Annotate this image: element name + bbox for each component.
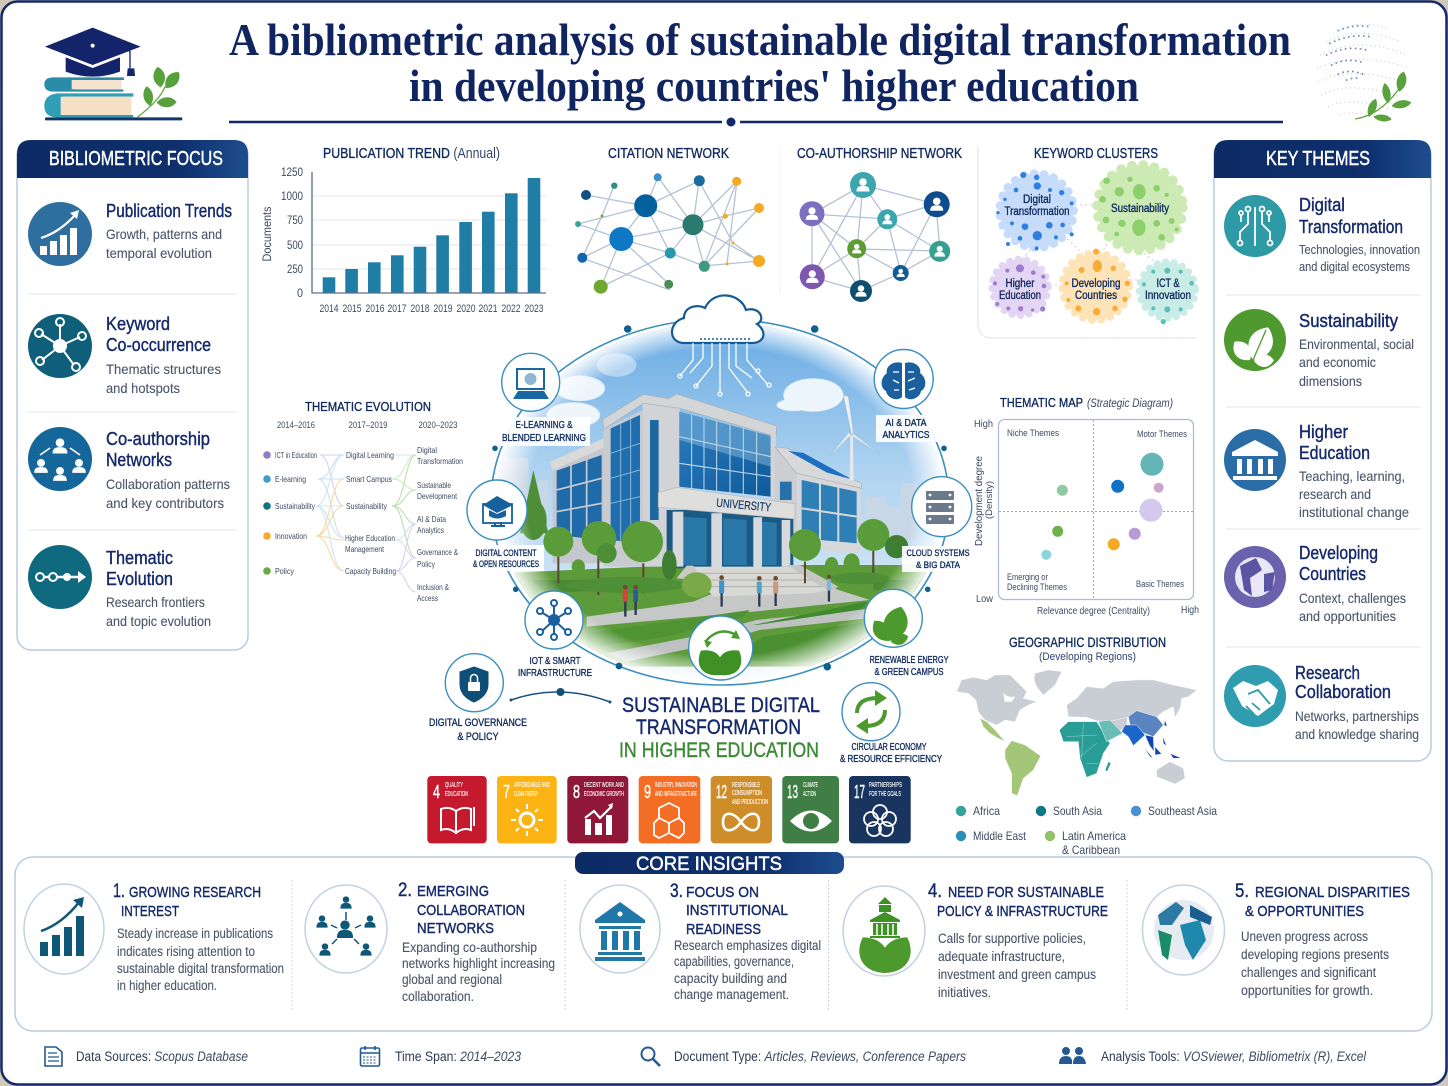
chart: keyword clusters: Education — [999, 290, 1041, 302]
callout: AI and data analytics: AI & DATA — [886, 417, 926, 429]
icon: SDG 12: CONSUMPTION — [732, 790, 762, 797]
icon: SDG 17: FOR THE GOALS — [869, 791, 901, 798]
insight 5: opportunities for growth. — [1241, 983, 1373, 998]
icon: SDG 4: 4 — [433, 782, 440, 802]
chart: publication trend: 2017 — [388, 303, 406, 315]
icon: cloud with circuit lines — [672, 295, 771, 396]
insight 3 — [580, 881, 821, 1002]
callout: renewable energy: & GREEN CAMPUS — [874, 667, 944, 678]
callout: IoT and smart infrastructure: INFRASTRUCTURE — [518, 668, 592, 679]
item: developing countries: Developing — [1299, 543, 1378, 563]
chart: publication trend: 750 — [287, 213, 303, 227]
heading: core insights — [575, 852, 844, 875]
chart: thematic map: THEMATIC MAP — [1000, 395, 1083, 410]
chart: keyword clusters: KEYWORD CLUSTERS — [1034, 146, 1158, 162]
chart: thematic evolution: Governance & — [417, 547, 458, 557]
skyline — [503, 458, 917, 540]
chart: publication trend: 2021 — [478, 303, 498, 315]
item: developing countries — [1224, 543, 1406, 624]
insight 1: indicates rising attention to — [117, 944, 255, 959]
callout: digital content: DIGITAL CONTENT — [476, 548, 537, 559]
icon: SDG 4: EDUCATION — [445, 791, 468, 798]
chart: thematic evolution: Development — [417, 491, 458, 501]
callout: AI and data analytics — [874, 350, 938, 442]
chart: thematic evolution: Digital Learning — [346, 450, 394, 460]
item: sustainability: and economic — [1299, 354, 1376, 370]
item: co-authorship networks: and key contributors — [106, 495, 224, 511]
chart: publication trend: PUBLICATION TREND (Annual) — [323, 146, 500, 162]
chart: thematic evolution: 2014–2016 — [277, 420, 315, 431]
insight 1: INTEREST — [121, 903, 179, 920]
insight 3: READINESS — [686, 921, 761, 938]
insight 2: collaboration. — [402, 989, 474, 1004]
icon: magnifier — [642, 1048, 660, 1066]
item: co-authorship networks: Networks — [106, 450, 172, 470]
item: keyword co-occurrence: Co-occurrence — [106, 335, 211, 355]
chart: publication trend: 2018 — [410, 303, 430, 315]
chart: citation network — [575, 146, 765, 294]
insight 1: sustainable digital transformation — [117, 961, 284, 976]
chart: thematic evolution: Sustainability — [275, 501, 316, 511]
chart: geographic distribution map: & Caribbean — [1062, 843, 1120, 857]
central campus illustration — [480, 310, 960, 690]
insight 2: NETWORKS — [417, 920, 494, 937]
trees and hedges — [520, 470, 908, 598]
chart: publication trend: 500 — [287, 238, 303, 252]
callout: circular economy: CIRCULAR ECONOMY — [852, 742, 927, 753]
chart: thematic evolution: E-learning — [275, 474, 306, 484]
icon: SDG 9: INDUSTRY, INNOVATION — [655, 782, 697, 789]
insight 5: Uneven progress across — [1241, 929, 1368, 944]
icon: SDG 13: CLIMATE — [803, 782, 818, 789]
item: digital transformation: Technologies, innovation — [1299, 242, 1420, 257]
item: co-authorship networks: Co-authorship — [106, 429, 210, 449]
item: sustainability: dimensions — [1299, 373, 1362, 389]
icon: SDG 9: AND INFRASTRUCTURE — [655, 791, 697, 798]
central heading — [619, 694, 820, 762]
chart: publication trend: 1250 — [281, 165, 303, 179]
insight 3: capabilities, governance, — [674, 954, 794, 969]
callout: digital content — [467, 480, 544, 571]
item: research collaboration: Networks, partnerships — [1295, 708, 1419, 724]
chart: co-authorship network — [780, 146, 962, 302]
item: higher education: Education — [1299, 443, 1370, 463]
chart: thematic evolution: Policy — [275, 566, 295, 576]
chart: thematic evolution: THEMATIC EVOLUTION — [305, 399, 431, 414]
chart: keyword clusters: Sustainability — [1111, 203, 1169, 215]
icon: calendar — [360, 1046, 380, 1066]
insight 3: Research emphasizes digital — [674, 938, 821, 953]
people — [625, 579, 829, 617]
title: A bibliometric analysis of sustainable digital transformation — [229, 14, 1291, 65]
callout: IoT and smart infrastructure — [518, 591, 592, 679]
insight 4 — [843, 881, 1108, 1000]
chart: thematic evolution: ICT in Education — [275, 450, 317, 460]
chart: keyword clusters: Transformation — [1004, 206, 1070, 218]
chart: keyword clusters: Countries — [1075, 290, 1117, 302]
footer: Analysis Tools: VOSviewer, Bibliometrix (R), Excel — [1101, 1049, 1367, 1064]
chart: publication trend: 2020 — [456, 303, 476, 315]
left wing — [550, 438, 606, 471]
insight 2: EMERGING — [417, 883, 489, 900]
central heading: SUSTAINABLE DIGITAL — [622, 694, 820, 717]
icon: SDG 12 — [711, 776, 772, 843]
callout: e-learning — [497, 353, 590, 446]
item: developing countries: Countries — [1299, 564, 1366, 584]
panel: core insights — [15, 852, 1432, 1031]
wind turbine — [850, 435, 854, 480]
chart: thematic evolution: Policy — [417, 559, 436, 569]
chart: thematic map: Emerging or — [1007, 572, 1048, 583]
connector arc — [510, 688, 612, 704]
icon: document — [45, 1047, 62, 1066]
heading: core insights: CORE INSIGHTS — [636, 853, 782, 875]
insight 2: networks highlight increasing — [402, 956, 555, 971]
icon: SDG 13: 13 — [787, 782, 798, 802]
footer: Time Span: 2014–2023 — [395, 1049, 521, 1064]
chart: thematic evolution: 2017–2019 — [348, 420, 388, 431]
item: thematic evolution: Thematic — [106, 548, 173, 568]
insight 2 — [305, 880, 555, 1004]
title — [229, 14, 1291, 126]
item: sustainability: Sustainability — [1299, 311, 1398, 331]
chart: geographic distribution map — [956, 635, 1217, 857]
icon: SDG 7 — [497, 776, 557, 843]
item: developing countries: Context, challenges — [1299, 590, 1406, 606]
callout: digital governance: & POLICY — [458, 731, 499, 743]
icon: graduation cap and books — [44, 28, 183, 120]
item: sustainability — [1224, 309, 1414, 389]
icon: SDG 8 — [567, 776, 628, 843]
chart: publication trend: 2023 — [524, 303, 544, 315]
insight 5: challenges and significant — [1241, 965, 1376, 980]
chart: thematic evolution: Transformation — [417, 456, 463, 466]
chart: publication trend: 250 — [287, 262, 303, 276]
chart: thematic evolution: Digital — [417, 445, 437, 455]
item: higher education: Higher — [1299, 422, 1348, 442]
heading: key themes — [1214, 140, 1431, 178]
chart: thematic map: (Density) — [984, 481, 994, 519]
insight 2: Expanding co-authorship — [402, 940, 537, 955]
insight 5: 5. — [1235, 881, 1249, 902]
icon: SDG 4 — [427, 776, 487, 843]
insight 1: GROWING RESEARCH — [129, 884, 261, 901]
callout: circular economy: & RESOURCE EFFICIENCY — [840, 754, 942, 765]
chart: thematic map: High — [974, 419, 993, 430]
callout: cloud systems: & BIG DATA — [916, 560, 961, 571]
icon: SDG 12: 12 — [716, 782, 727, 802]
heading: bibliometric focus: BIBLIOMETRIC FOCUS — [49, 148, 223, 170]
icon: SDG 7: AFFORDABLE AND — [514, 782, 550, 789]
insight 3: 3. — [670, 881, 683, 902]
item: thematic evolution: and topic evolution — [106, 613, 211, 629]
item: thematic evolution — [28, 545, 211, 629]
callout: digital content: & OPEN RESOURCES — [473, 559, 539, 570]
callout: AI and data analytics: ANALYTICS — [882, 429, 930, 441]
icon: SDG 8: DECENT WORK AND — [584, 782, 624, 789]
chart: thematic evolution: 2020–2023 — [418, 420, 458, 431]
item: publication trends: Growth, patterns and — [106, 226, 222, 242]
insight 3: change management. — [674, 987, 789, 1002]
chart: publication trend: 2015 — [342, 303, 362, 315]
insight 5: & OPPORTUNITIES — [1245, 903, 1364, 920]
panel: key themes — [1214, 140, 1431, 761]
chart: thematic map: High — [1181, 605, 1199, 616]
callout: e-learning: E-LEARNING & — [516, 419, 572, 431]
chart: thematic evolution: AI & Data — [417, 514, 446, 524]
insight 4: initiatives. — [938, 985, 991, 1000]
chart: publication trend: 1000 — [281, 189, 303, 203]
central heading: IN HIGHER EDUCATION — [619, 739, 819, 762]
chart: thematic map: (Strategic Diagram) — [1087, 398, 1173, 410]
insight 2: global and regional — [402, 972, 502, 987]
callout: renewable energy: RENEWABLE ENERGY — [870, 655, 949, 666]
item: publication trends: temporal evolution — [106, 245, 212, 261]
chart: thematic evolution: Sustainable — [417, 480, 451, 490]
item: developing countries: and opportunities — [1299, 608, 1396, 624]
item: digital transformation: and digital ecosystems — [1299, 259, 1410, 274]
chart: thematic map: Declining Themes — [1007, 582, 1067, 593]
item: publication trends: Publication Trends — [106, 201, 232, 221]
chart: thematic evolution: Smart Campus — [346, 474, 392, 484]
footer — [45, 1046, 1367, 1066]
icon: SDG 8: ECONOMIC GROWTH — [584, 791, 624, 798]
icon: SDG 13 — [782, 776, 839, 843]
chart: keyword clusters: Higher — [1006, 278, 1035, 290]
SDG icons — [427, 776, 911, 843]
item: co-authorship networks: Collaboration patterns — [106, 476, 230, 492]
item: research collaboration: Research — [1295, 663, 1360, 683]
chart: publication trend: 2016 — [366, 303, 384, 315]
tower — [603, 410, 643, 567]
chart: thematic map: Low — [976, 594, 994, 605]
item: research collaboration: and knowledge sharing — [1295, 726, 1419, 742]
item: higher education: research and — [1299, 486, 1371, 502]
clouds — [547, 353, 843, 428]
heading: bibliometric focus — [17, 140, 248, 178]
icon: SDG 17: 17 — [854, 782, 865, 802]
central heading: TRANSFORMATION — [636, 716, 801, 739]
portico — [667, 510, 793, 568]
item: digital transformation — [1224, 195, 1420, 274]
insight 1: in higher education. — [117, 978, 217, 993]
item: thematic evolution: Evolution — [106, 569, 173, 589]
callout: IoT and smart infrastructure: IOT & SMART — [530, 656, 580, 667]
callout: central sustainability emblem — [689, 616, 753, 682]
chart: thematic map: Niche Themes — [1007, 428, 1059, 439]
icon: SDG 17: PARTNERSHIPS — [869, 782, 902, 789]
chart: thematic map — [974, 395, 1199, 617]
insight 2: COLLABORATION — [417, 902, 525, 919]
chart: citation network: CITATION NETWORK — [608, 146, 729, 162]
insight 1 — [24, 881, 284, 993]
chart: keyword clusters — [978, 146, 1196, 338]
insight 4: POLICY & INFRASTRUCTURE — [937, 903, 1108, 920]
steps — [688, 567, 837, 597]
item: keyword co-occurrence: Keyword — [106, 314, 170, 334]
item: digital transformation: Transformation — [1299, 217, 1403, 237]
callout: digital governance: DIGITAL GOVERNANCE — [429, 717, 527, 729]
icon: SDG 8: 8 — [573, 782, 580, 802]
insight 5: developing regions presents — [1241, 947, 1389, 962]
chart: thematic map: Development degree — [974, 456, 985, 546]
item: higher education: institutional change — [1299, 504, 1409, 520]
insight 1: 1. — [113, 881, 125, 902]
chart: geographic distribution map: South Asia — [1053, 804, 1102, 818]
chart: geographic distribution map: Africa — [973, 804, 1000, 818]
item: thematic evolution: Research frontiers — [106, 594, 205, 610]
central campus illustration: UNIVERSITY — [716, 496, 772, 514]
footer: Data Sources: Scopus Database — [76, 1049, 248, 1064]
insight 4: adequate infrastructure, — [938, 949, 1065, 964]
chart: publication trend: 2014 — [320, 303, 338, 315]
icon: SDG 9 — [639, 776, 700, 843]
chart: thematic evolution: Capacity Building — [345, 566, 396, 576]
chart: thematic evolution: Higher Education — [345, 533, 395, 543]
item: higher education: Teaching, learning, — [1299, 468, 1405, 484]
chart: co-authorship network: CO-AUTHORSHIP NETWORK — [797, 146, 962, 162]
icon: SDG 9: 9 — [644, 782, 651, 802]
panel: bibliometric focus — [17, 140, 248, 650]
insight 1: Steady increase in publications — [117, 926, 273, 941]
chart: thematic evolution: Sustainability — [346, 501, 388, 511]
insight 2: 2. — [398, 880, 412, 901]
chart: geographic distribution map: Latin America — [1062, 829, 1126, 843]
item: research collaboration — [1224, 663, 1419, 742]
chart: thematic evolution: Innovation — [275, 531, 307, 541]
upper glass facade — [679, 412, 771, 497]
item: publication trends — [28, 201, 232, 266]
item: co-authorship networks — [28, 427, 230, 511]
insight 5 — [1142, 881, 1410, 998]
callout: renewable energy — [864, 589, 949, 678]
chart: geographic distribution map: (Developing Regions) — [1039, 651, 1136, 663]
item: research collaboration: Collaboration — [1295, 682, 1391, 702]
chart: thematic evolution: Access — [417, 593, 438, 603]
chart: geographic distribution map: Middle East — [973, 829, 1027, 843]
item: sustainability: Environmental, social — [1299, 336, 1414, 352]
callout: digital governance — [429, 654, 527, 743]
chart: keyword clusters: Developing — [1072, 278, 1120, 290]
insight 3: INSTITUTIONAL — [686, 902, 788, 919]
chart: publication trend: 2019 — [434, 303, 452, 315]
ground — [500, 565, 940, 667]
chart: thematic map: Relevance degree (Centrality) — [1037, 606, 1150, 617]
icon: SDG 7: 7 — [503, 782, 510, 802]
chart: thematic map: Basic Themes — [1136, 579, 1184, 590]
chart: thematic evolution: Inclusion & — [417, 582, 449, 592]
icon: analysts — [1059, 1047, 1086, 1064]
item: keyword co-occurrence: Thematic structures — [106, 361, 221, 377]
icon: SDG 12: AND PRODUCTION — [732, 799, 768, 806]
callout: cloud systems — [902, 477, 974, 572]
insight 4: 4. — [928, 881, 942, 902]
callout: e-learning: BLENDED LEARNING — [502, 432, 586, 444]
insight 3: FOCUS ON — [686, 884, 759, 901]
icon: SDG 12: RESPONSIBLE — [732, 782, 760, 789]
chart: publication trend: Documents — [260, 206, 274, 262]
icon: SDG 7: CLEAN ENERGY — [514, 791, 538, 798]
insight 4: Calls for supportive policies, — [938, 931, 1086, 946]
callout: cloud systems: CLOUD SYSTEMS — [906, 548, 970, 559]
heading: key themes: KEY THEMES — [1266, 148, 1370, 170]
chart: thematic evolution: Analytics — [417, 525, 444, 535]
item: keyword co-occurrence: and hotspots — [106, 380, 180, 396]
insight 4: NEED FOR SUSTAINABLE — [948, 884, 1104, 901]
callout: circular economy — [840, 683, 942, 765]
icon: dotted globe with leaves — [1317, 24, 1412, 123]
chart: publication trend: 0 — [297, 286, 303, 300]
chart: publication trend — [260, 146, 546, 315]
ring nodes — [492, 325, 947, 670]
insight 4: investment and green campus — [938, 967, 1096, 982]
chart: geographic distribution map: GEOGRAPHIC DISTRIBUTION — [1009, 635, 1166, 650]
chart: thematic map: Motor Themes — [1137, 429, 1187, 440]
insight 3: capacity building and — [674, 971, 787, 986]
chart: keyword clusters: ICT & — [1156, 278, 1180, 290]
chart: keyword clusters: Innovation — [1145, 290, 1191, 302]
right wing — [775, 450, 796, 534]
chart: publication trend: 2022 — [502, 303, 520, 315]
item: keyword co-occurrence — [28, 314, 221, 396]
chart: keyword clusters: Digital — [1023, 194, 1051, 206]
icon: SDG 4: QUALITY — [445, 782, 463, 789]
insight 5: REGIONAL DISPARITIES — [1255, 884, 1410, 901]
chart: geographic distribution map: Southeast Asia — [1148, 804, 1217, 818]
footer: Document Type: Articles, Reviews, Conference Papers — [674, 1049, 966, 1064]
icon: SDG 13: ACTION — [803, 791, 816, 798]
title: in developing countries' higher education — [409, 60, 1139, 111]
chart: thematic evolution — [263, 399, 463, 603]
item: higher education — [1224, 422, 1409, 520]
chart: thematic evolution: Management — [345, 544, 384, 554]
item: digital transformation: Digital — [1299, 195, 1345, 215]
icon: SDG 17 — [849, 776, 911, 843]
